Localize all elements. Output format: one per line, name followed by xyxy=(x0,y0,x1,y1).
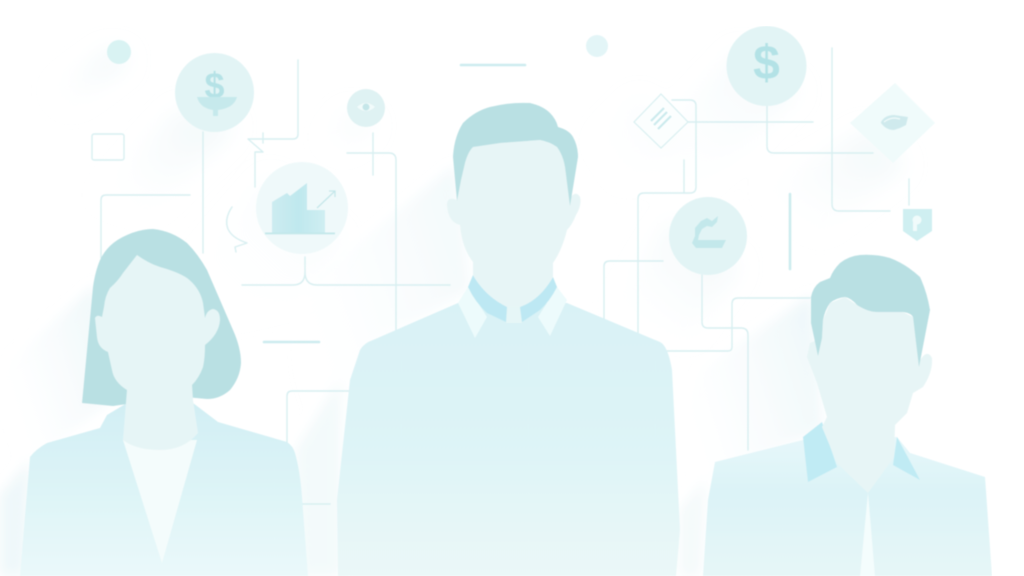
accent dashes xyxy=(264,65,790,342)
center man sweater xyxy=(337,303,680,576)
icon: eye badge xyxy=(347,89,385,127)
woman blouse xyxy=(123,440,197,563)
person: woman xyxy=(20,229,308,576)
icon: dollar circle: $ xyxy=(753,37,780,90)
woman jacket xyxy=(20,403,308,576)
right man face xyxy=(807,297,932,493)
right man shirt xyxy=(703,437,992,576)
woman face and neck xyxy=(95,255,220,450)
icon: key shield xyxy=(903,209,932,241)
right man hair xyxy=(811,255,930,367)
right man tie xyxy=(860,493,875,576)
icon: dollar circle xyxy=(726,26,806,106)
long diagonal shadows xyxy=(50,50,905,340)
center man hair xyxy=(453,103,578,206)
outline box xyxy=(92,134,124,160)
center man blue collar xyxy=(468,275,557,322)
person: right man xyxy=(703,255,992,576)
woman hair xyxy=(82,229,241,406)
icon: shield on tilted card xyxy=(850,83,935,163)
icon: dollar over bowl xyxy=(175,53,254,132)
circuit lines xyxy=(92,48,909,504)
small dots xyxy=(107,35,608,64)
icon: dollar over bowl: $ xyxy=(204,65,225,106)
icon: bar chart xyxy=(256,162,348,254)
person: center man xyxy=(337,103,680,576)
icon: document diamond xyxy=(634,94,688,148)
center man face xyxy=(447,140,580,307)
right man collar xyxy=(803,422,920,482)
icon: boat circle xyxy=(669,197,747,275)
center man white collar xyxy=(458,287,567,338)
